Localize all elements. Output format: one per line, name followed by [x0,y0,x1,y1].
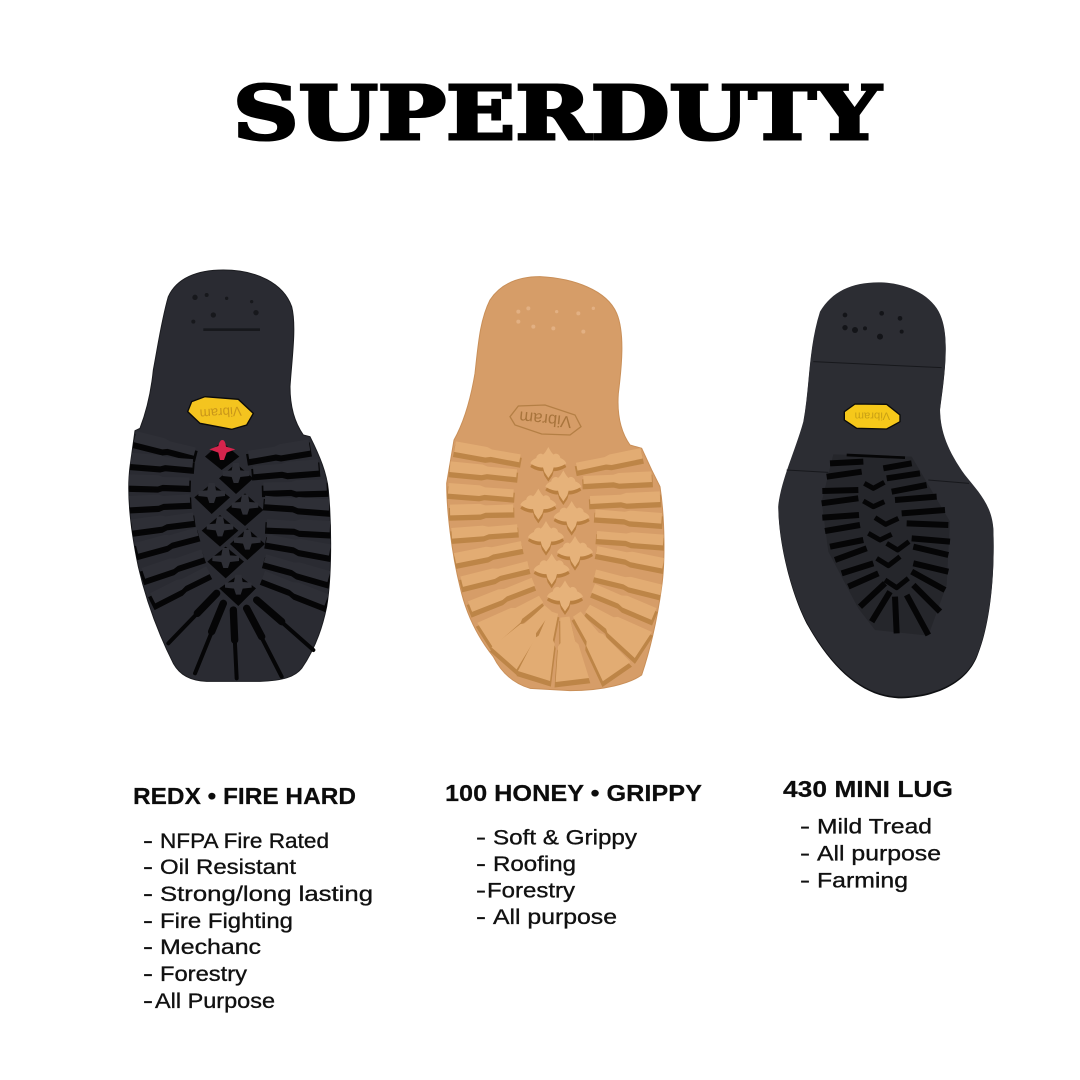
feature list: Strong/long lasting [160,882,373,906]
text block: RedX Fire Hard [133,783,373,1013]
feature list: Mechanc [160,935,261,959]
feature list: - [800,842,810,866]
icon: embossed Vibram badge [510,405,581,435]
embossed marks [516,306,595,334]
panel: 100 Honey outsole photo [447,277,664,691]
sole body [129,270,331,681]
feature list: - [143,829,153,853]
sole body [778,284,994,698]
panel: 430 Mini Lug outsole photo [778,282,994,698]
icon: embossed Vibram badge: Vibram [518,407,572,432]
feature list: Forestry [160,962,247,986]
feature list: Fire Fighting [160,909,293,933]
tread lugs [129,431,331,610]
feature list: All purpose [493,905,617,929]
feature list: - [143,909,153,933]
panel: RedX outsole photo [129,270,331,681]
feature list: Oil Resistant [160,855,296,879]
feature list: - [143,989,153,1013]
text block: 100 Honey Grippy [445,780,702,929]
feature list: Farming [817,868,908,892]
toe fan grooves [168,593,313,678]
icon: yellow Vibram badge [188,397,253,429]
icon: red cross plug [209,440,235,460]
feature list: - [143,855,153,879]
feature list: - [143,935,153,959]
feature list: - [476,878,486,902]
feature list: - [800,814,810,838]
feature list [143,829,373,1013]
heading: REDX • FIRE HARD [133,783,356,809]
centre cross lugs [194,442,265,606]
feature list: - [476,826,486,850]
tread lugs [448,441,664,686]
sole section lines [787,362,969,483]
feature list: NFPA Fire Rated [160,829,329,853]
icon: yellow Vibram badge: Vibram [199,404,242,421]
centre cross lugs [520,447,593,615]
feature list: Mild Tread [817,814,932,838]
sole body [447,277,664,691]
feature list: Forestry [487,878,575,902]
heading: 100 HONEY • GRIPPY [445,780,702,806]
icon: yellow Vibram badge: Vibram [854,410,890,422]
sole top surface [778,282,994,697]
icon: yellow Vibram badge [844,404,900,429]
feature list: - [476,905,486,929]
heading: 430 MINI LUG [783,776,953,802]
title: SUPERDUTY [233,71,882,157]
feature list: All purpose [817,842,941,866]
embossed marks [842,311,904,340]
embossed marks [191,293,260,331]
feature list: - [143,882,153,906]
feature list: - [800,868,810,892]
feature list: Roofing [493,852,576,876]
feature list: - [143,962,153,986]
feature list [476,826,637,929]
feature list: All Purpose [155,989,275,1013]
text block: 430 Mini Lug [783,776,953,892]
mini tread [822,454,950,636]
feature list: - [476,852,486,876]
feature list [800,814,941,892]
feature list: Soft & Grippy [493,826,637,850]
